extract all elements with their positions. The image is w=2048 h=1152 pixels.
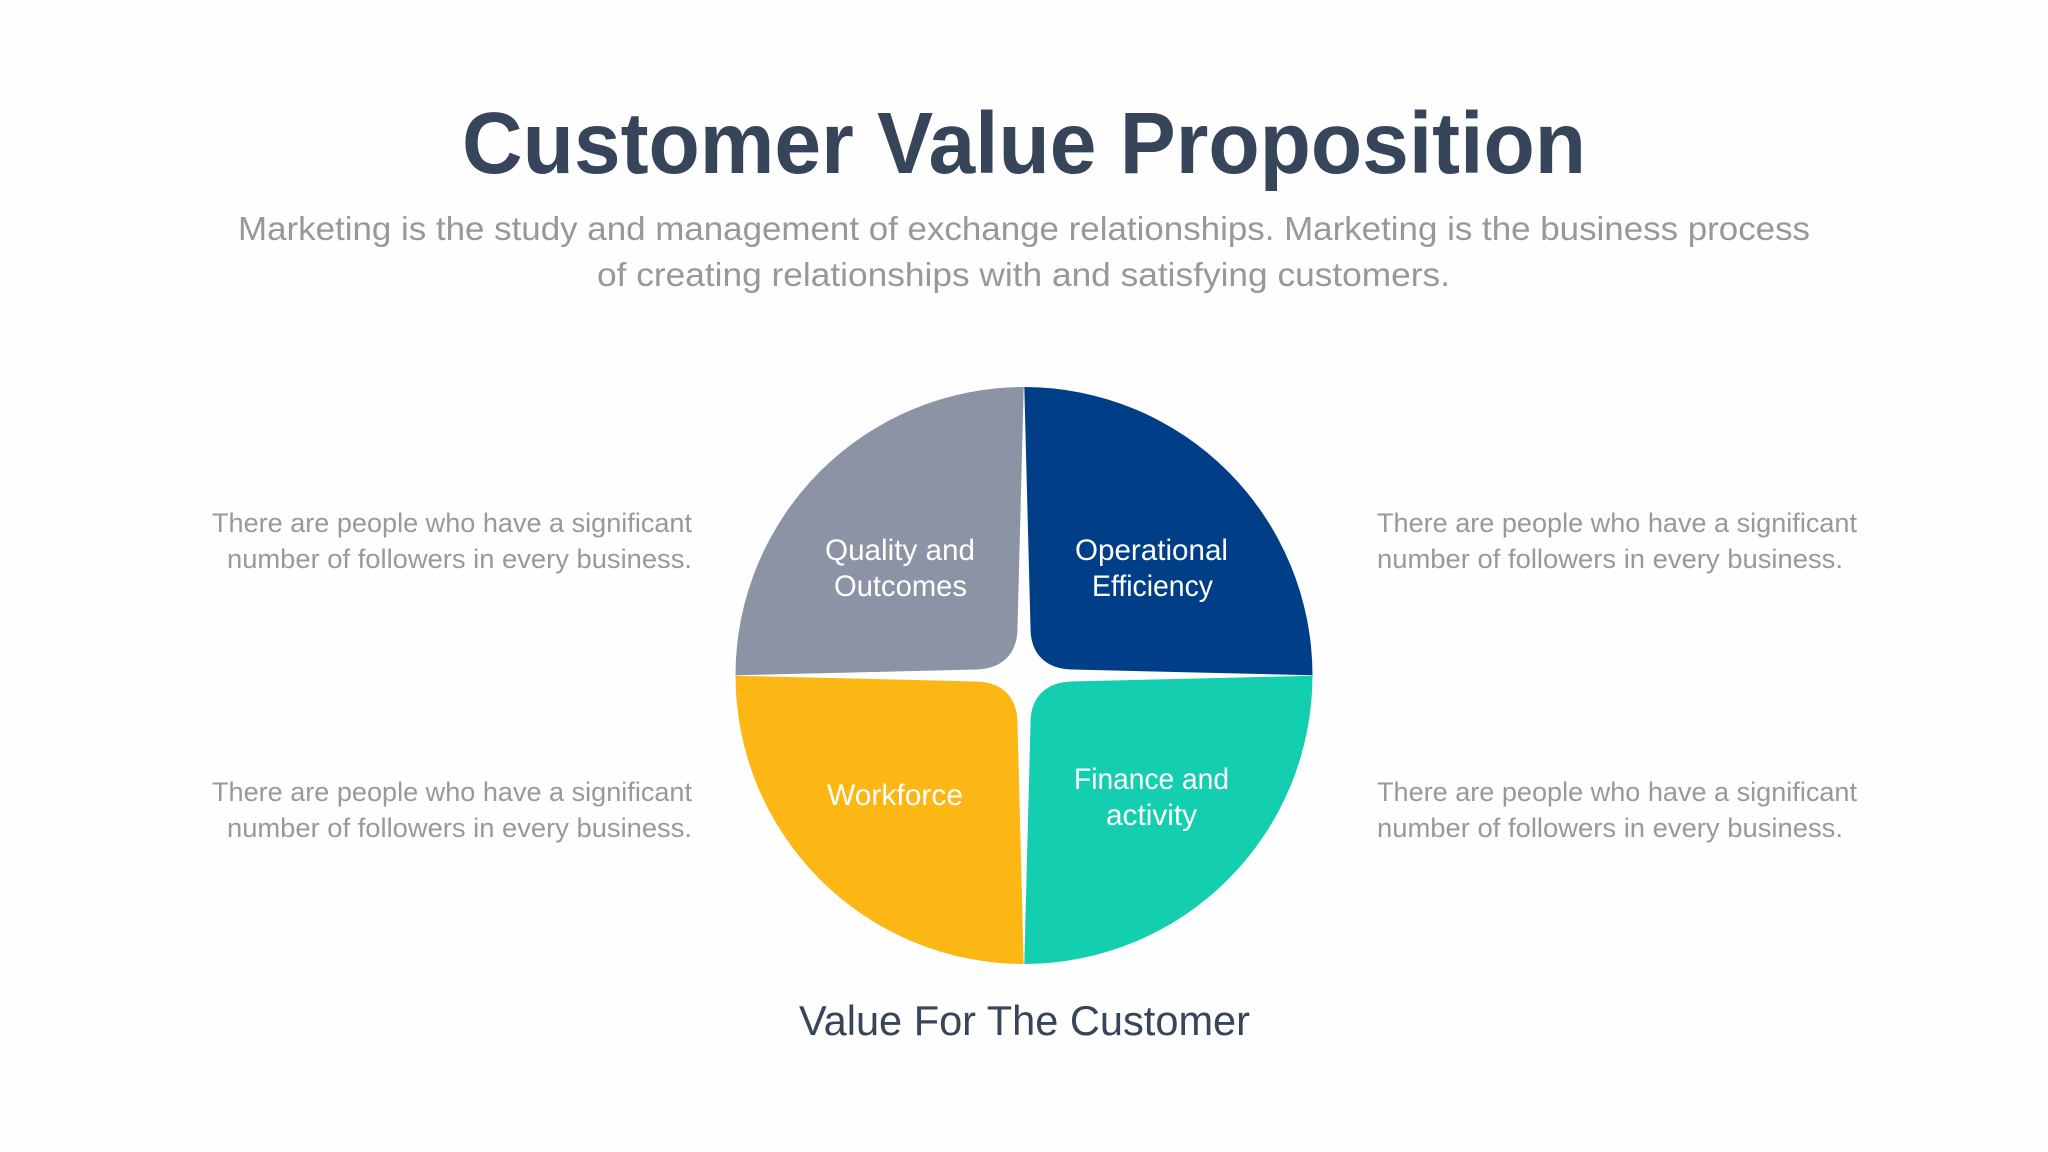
- segment: operational efficiency: Operational: [1075, 534, 1228, 567]
- text block: bottom left description: number of followers in every business.: [227, 813, 692, 843]
- caption: value for the customer: Value For The Customer: [799, 997, 1250, 1044]
- title: Customer Value Proposition: [462, 95, 1586, 192]
- segment: workforce: [736, 676, 1024, 964]
- segment: operational efficiency: Efficiency: [1092, 570, 1213, 603]
- text block: bottom right description: [1377, 777, 1857, 843]
- text block: top right description: [1377, 508, 1857, 574]
- text block: top left description: There are people who have a significant: [212, 508, 692, 538]
- segment: finance and activity: [1024, 676, 1312, 964]
- text block: bottom left description: [212, 777, 692, 843]
- text block: top left description: [212, 508, 692, 574]
- segment: finance and activity: activity: [1106, 799, 1197, 832]
- text block: top right description: number of followers in every business.: [1377, 544, 1843, 574]
- subtitle text block: Marketing is the study and management of exchange relationships. Marketing is the business process: [238, 210, 1810, 247]
- segment: finance and activity: Finance and: [1074, 763, 1229, 796]
- segment: quality and outcomes: [736, 387, 1024, 675]
- subtitle text block: [238, 210, 1810, 293]
- text block: bottom left description: There are people who have a significant: [212, 777, 692, 807]
- segment: quality and outcomes: Quality and: [825, 534, 975, 567]
- text block: top right description: There are people who have a significant: [1377, 508, 1857, 538]
- text block: bottom right description: number of followers in every business.: [1377, 813, 1843, 843]
- segment: quality and outcomes: Outcomes: [834, 570, 967, 603]
- text block: top left description: number of followers in every business.: [227, 544, 692, 574]
- pie diagram: [736, 387, 1312, 964]
- segment: workforce: Workforce: [827, 779, 963, 812]
- segment: operational efficiency: [1024, 387, 1312, 675]
- subtitle text block: of creating relationships with and satisfying customers.: [597, 256, 1450, 293]
- text block: bottom right description: There are people who have a significant: [1377, 777, 1857, 807]
